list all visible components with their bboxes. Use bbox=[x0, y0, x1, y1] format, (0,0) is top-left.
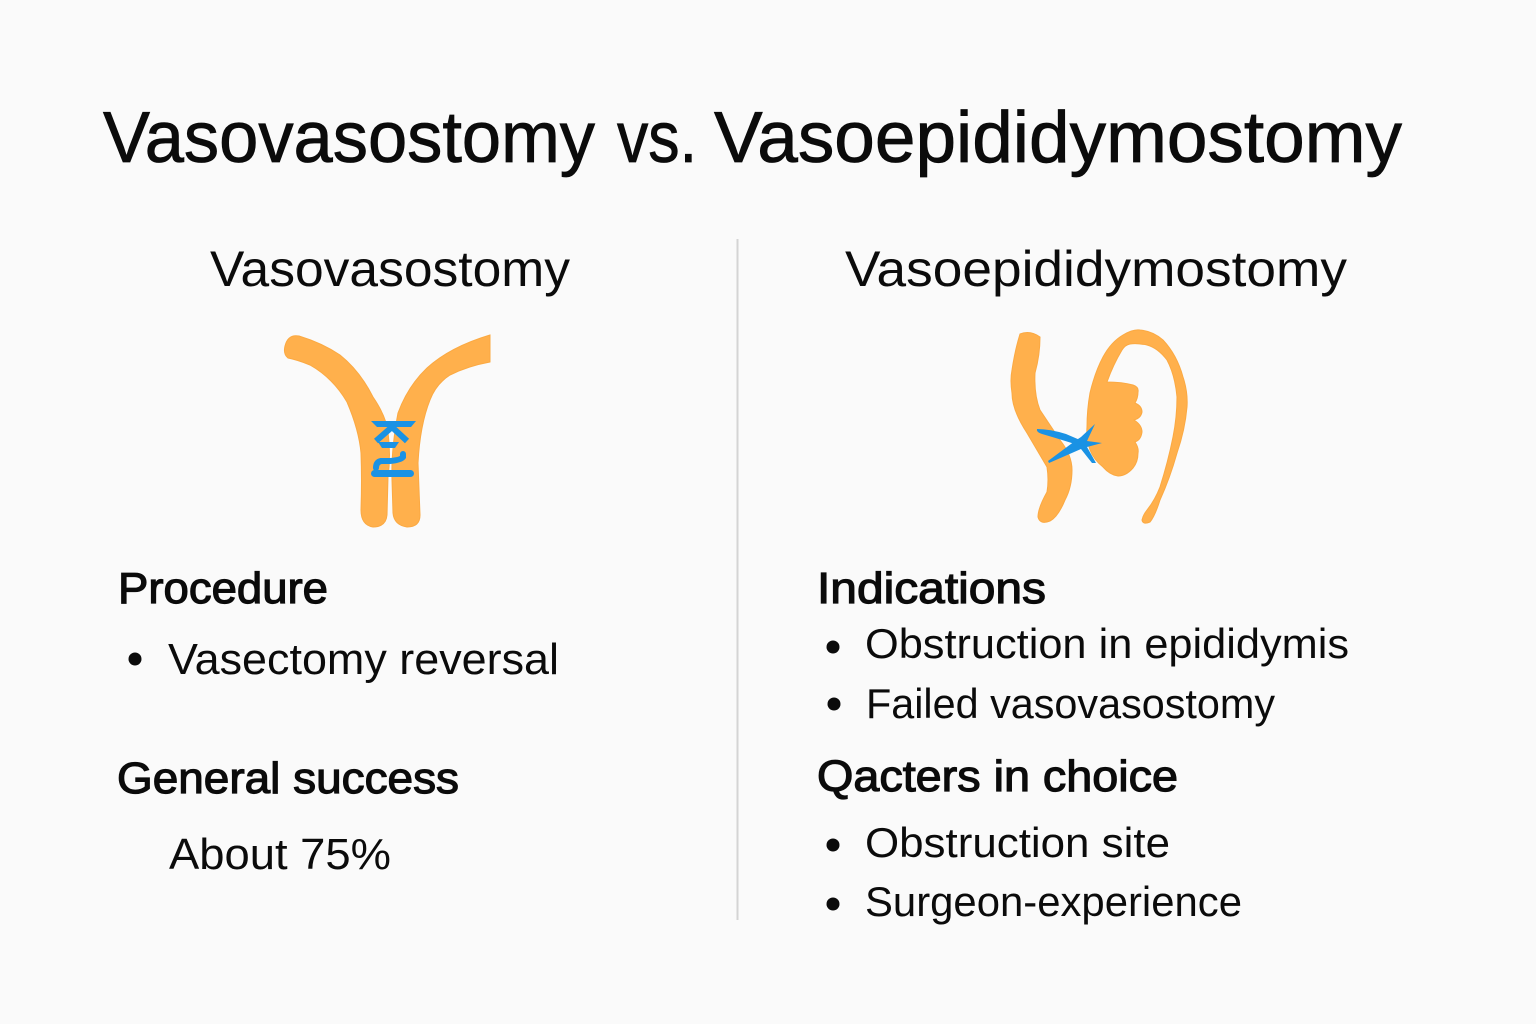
subheading: procedure: Procedure bbox=[118, 564, 328, 613]
bullet: vasectomy reversal: Vasectomy reversal bbox=[168, 635, 559, 684]
bullet: surgeon-experience: Surgeon-experience bbox=[865, 878, 1242, 925]
title bbox=[103, 98, 1402, 178]
subheading: general success: General success bbox=[117, 754, 459, 803]
panel: vasoepididymostomy bbox=[817, 241, 1349, 925]
bullet: obstruction site: Obstruction site bbox=[865, 819, 1170, 866]
icon: blue sutures bbox=[371, 421, 416, 477]
icon: blue cross stitch bbox=[1037, 424, 1102, 463]
heading: vasoepididymostomy: Vasoepididymostomy bbox=[845, 241, 1347, 297]
bullet: failed vasovasostomy: Failed vasovasostomy bbox=[866, 680, 1275, 727]
title: vs. bbox=[617, 98, 697, 178]
heading: vasovasostomy: Vasovasostomy bbox=[210, 241, 570, 297]
subheading: qacters in choice: Qacters in choice bbox=[817, 752, 1178, 801]
title: Vasoepididymostomy bbox=[714, 98, 1402, 178]
title: Vasovasostomy bbox=[103, 98, 595, 178]
text: about 75%: About 75% bbox=[169, 830, 391, 879]
icon: rejoined vas deferens bbox=[284, 335, 490, 527]
panel: vasovasostomy bbox=[117, 241, 570, 879]
icon: vas joined to epididymis bbox=[1011, 330, 1187, 523]
bullet: obstruction in epididymis: Obstruction in epididymis bbox=[865, 620, 1349, 667]
subheading: indications: Indications bbox=[817, 564, 1046, 613]
